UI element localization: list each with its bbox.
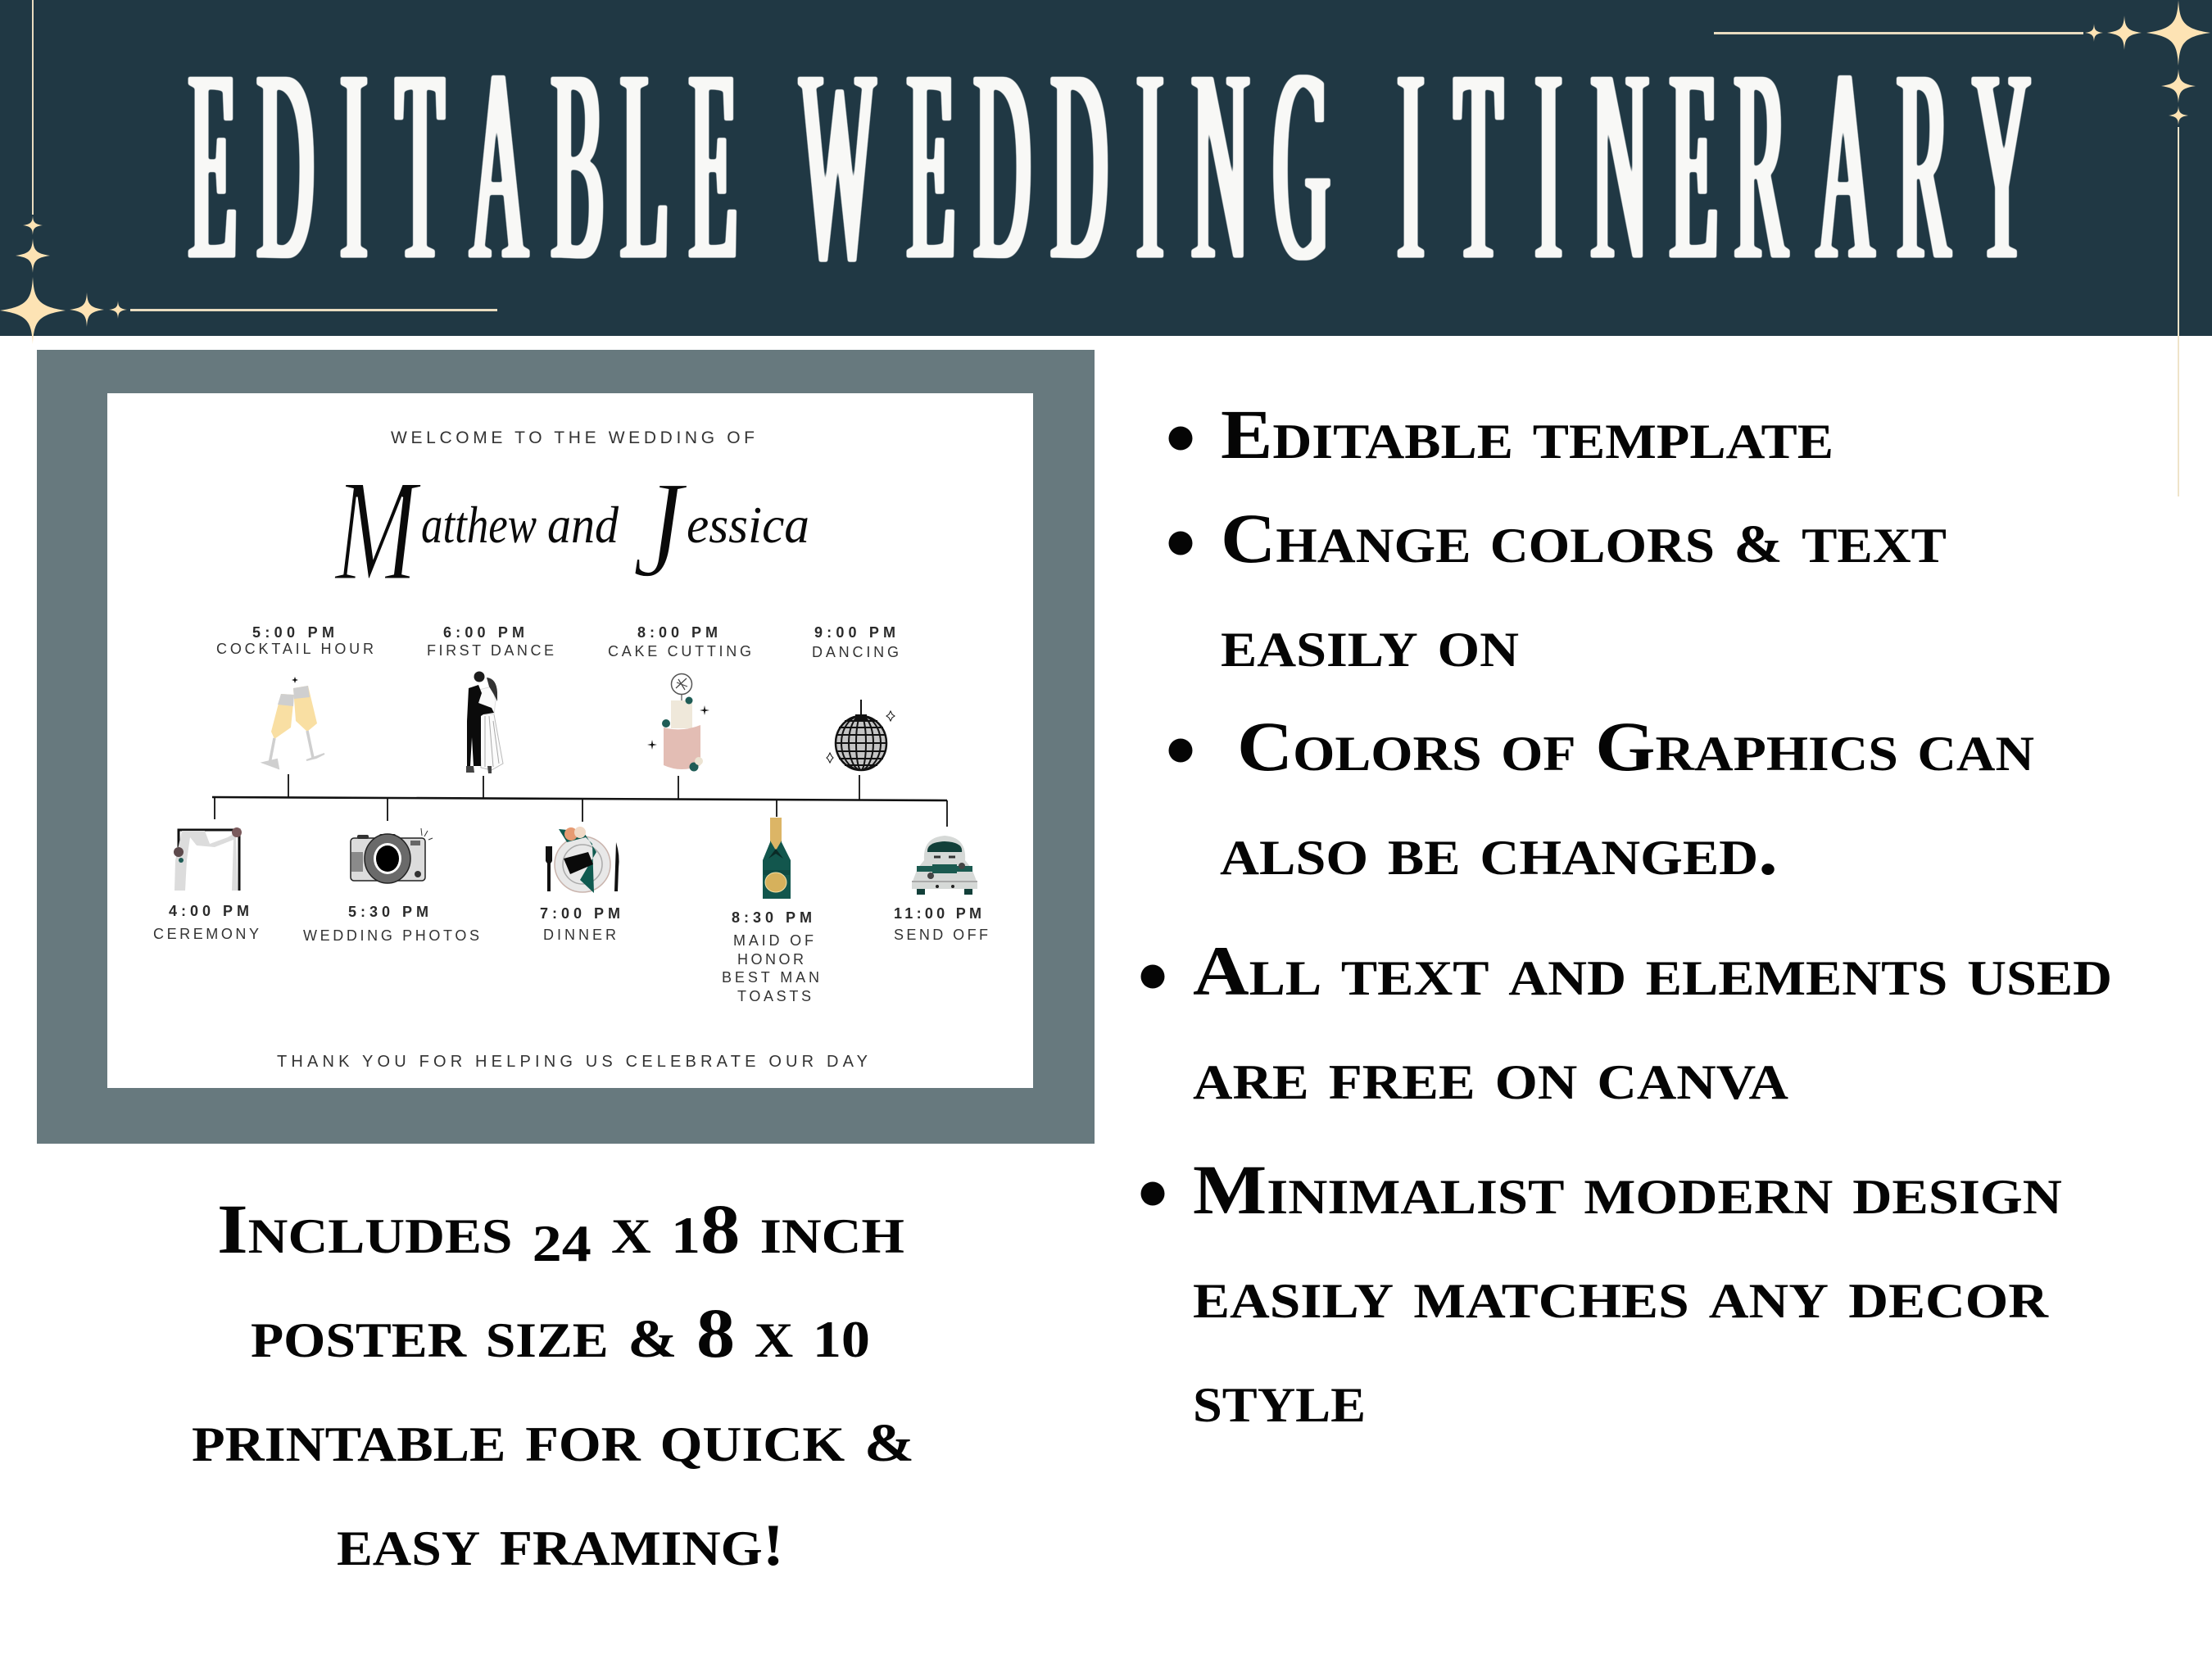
event: send off [894,905,988,943]
bullet: minimalist design [1140,1150,2062,1437]
timeline connector [212,774,947,827]
icon: wedding cake [647,673,709,772]
poster couple names: J [632,452,688,606]
event: toasts: 8:30 PM [732,909,812,926]
text: sizes caption: poster size & 8 x 10 [251,1294,870,1372]
text: sizes caption: Includes [217,1190,479,1268]
bullet: colors of graphics [1168,707,2034,890]
bullet: minimalist design: Minimalist modern design [1193,1150,2062,1229]
event: cake cutting [608,624,751,660]
bullet: free on canva [1140,931,2112,1114]
title: EDITABLE [189,13,737,318]
text: sizes caption [192,1190,914,1580]
icon: place setting [546,827,619,893]
icon: camera [351,828,433,883]
poster couple names: atthew [421,496,537,554]
text: sizes caption: easy framing ! [337,1502,784,1580]
bullet: colors of graphics: Colors of Graphics can [1237,707,2034,786]
poster thank-you line: THANK YOU FOR HELPING US CELEBRATE OUR DAY [277,1053,868,1071]
event: ceremony: 4:00 PM [169,903,249,919]
event: first dance [427,624,554,659]
bullet: minimalist design: style [1193,1358,1366,1437]
text: sizes caption: 18 inch [671,1190,882,1268]
event: toasts: TOASTS [737,988,811,1004]
decoration: bottom-left sparkles and lines [0,0,497,344]
bullet: change colors: easily on [1221,603,1519,682]
text: sizes caption: x [592,1190,671,1268]
icon: champagne bottle [763,818,791,899]
poster couple names: and [547,496,619,554]
event: first dance: 6:00 PM [443,624,524,641]
event: wedding photos: 5:30 PM [348,904,428,920]
event: send off: 11:00 PM [894,905,981,922]
event: ceremony [153,903,259,942]
event: toasts: MAID OF [733,932,814,949]
event: send off: SEND OFF [894,927,988,943]
bullet: free on canva: All text and elements used [1193,931,2112,1010]
title: ITINERARY [1398,13,2030,318]
icon: dancing couple [466,672,503,773]
event: cake cutting: CAKE CUTTING [608,643,751,660]
poster couple names: M [333,449,422,611]
event: dinner: DINNER [543,927,616,943]
event: toasts [722,909,819,1004]
poster couple names: essica [687,496,809,554]
event: cocktail hour: 5:00 PM [252,624,334,641]
icon: champagne flutes [263,677,324,768]
event: dinner [540,905,620,943]
event: cocktail hour: COCKTAIL HOUR [216,641,374,657]
icon: disco ball [827,700,895,770]
bullet: minimalist design: easily matches any decor [1193,1254,2049,1333]
event: dancing: DANCING [812,644,899,660]
event: cake cutting: 8:00 PM [637,624,718,641]
event: ceremony: CEREMONY [153,926,259,942]
bullet: change colors: Change colors & text [1221,499,1947,578]
title [189,13,2030,318]
event: wedding photos [303,904,479,944]
icon: ceremony arch [174,827,242,891]
event: first dance: FIRST DANCE [427,642,554,659]
bullet: colors of graphics: also be changed. [1220,811,1778,890]
decoration: top-right sparkles and lines [1714,0,2210,496]
poster welcome line: WELCOME TO THE WEDDING OF [391,428,755,447]
title: WEDDING [801,13,1330,318]
event: dancing: 9:00 PM [814,624,895,641]
list: feature bullets [1140,395,2112,1437]
icon: getaway car [912,836,977,895]
poster couple names [333,449,809,611]
event: dancing [812,624,899,660]
event: toasts: BEST MAN [722,969,819,986]
panel: itinerary poster [107,393,1033,1088]
panel: poster frame [37,350,1095,1144]
bullet: free on canva: are free on canva [1193,1036,1788,1114]
event: dinner: 7:00 PM [540,905,620,922]
header band [0,0,2212,336]
event: wedding photos: WEDDING PHOTOS [303,927,479,944]
text: sizes caption: 24 [533,1214,592,1272]
text: sizes caption: printable for quick & [192,1398,914,1476]
event: toasts: HONOR [737,951,804,968]
event: cocktail hour [216,624,374,657]
bullet: editable template: Editable template [1221,395,1834,474]
bullet: change colors [1168,499,1947,682]
